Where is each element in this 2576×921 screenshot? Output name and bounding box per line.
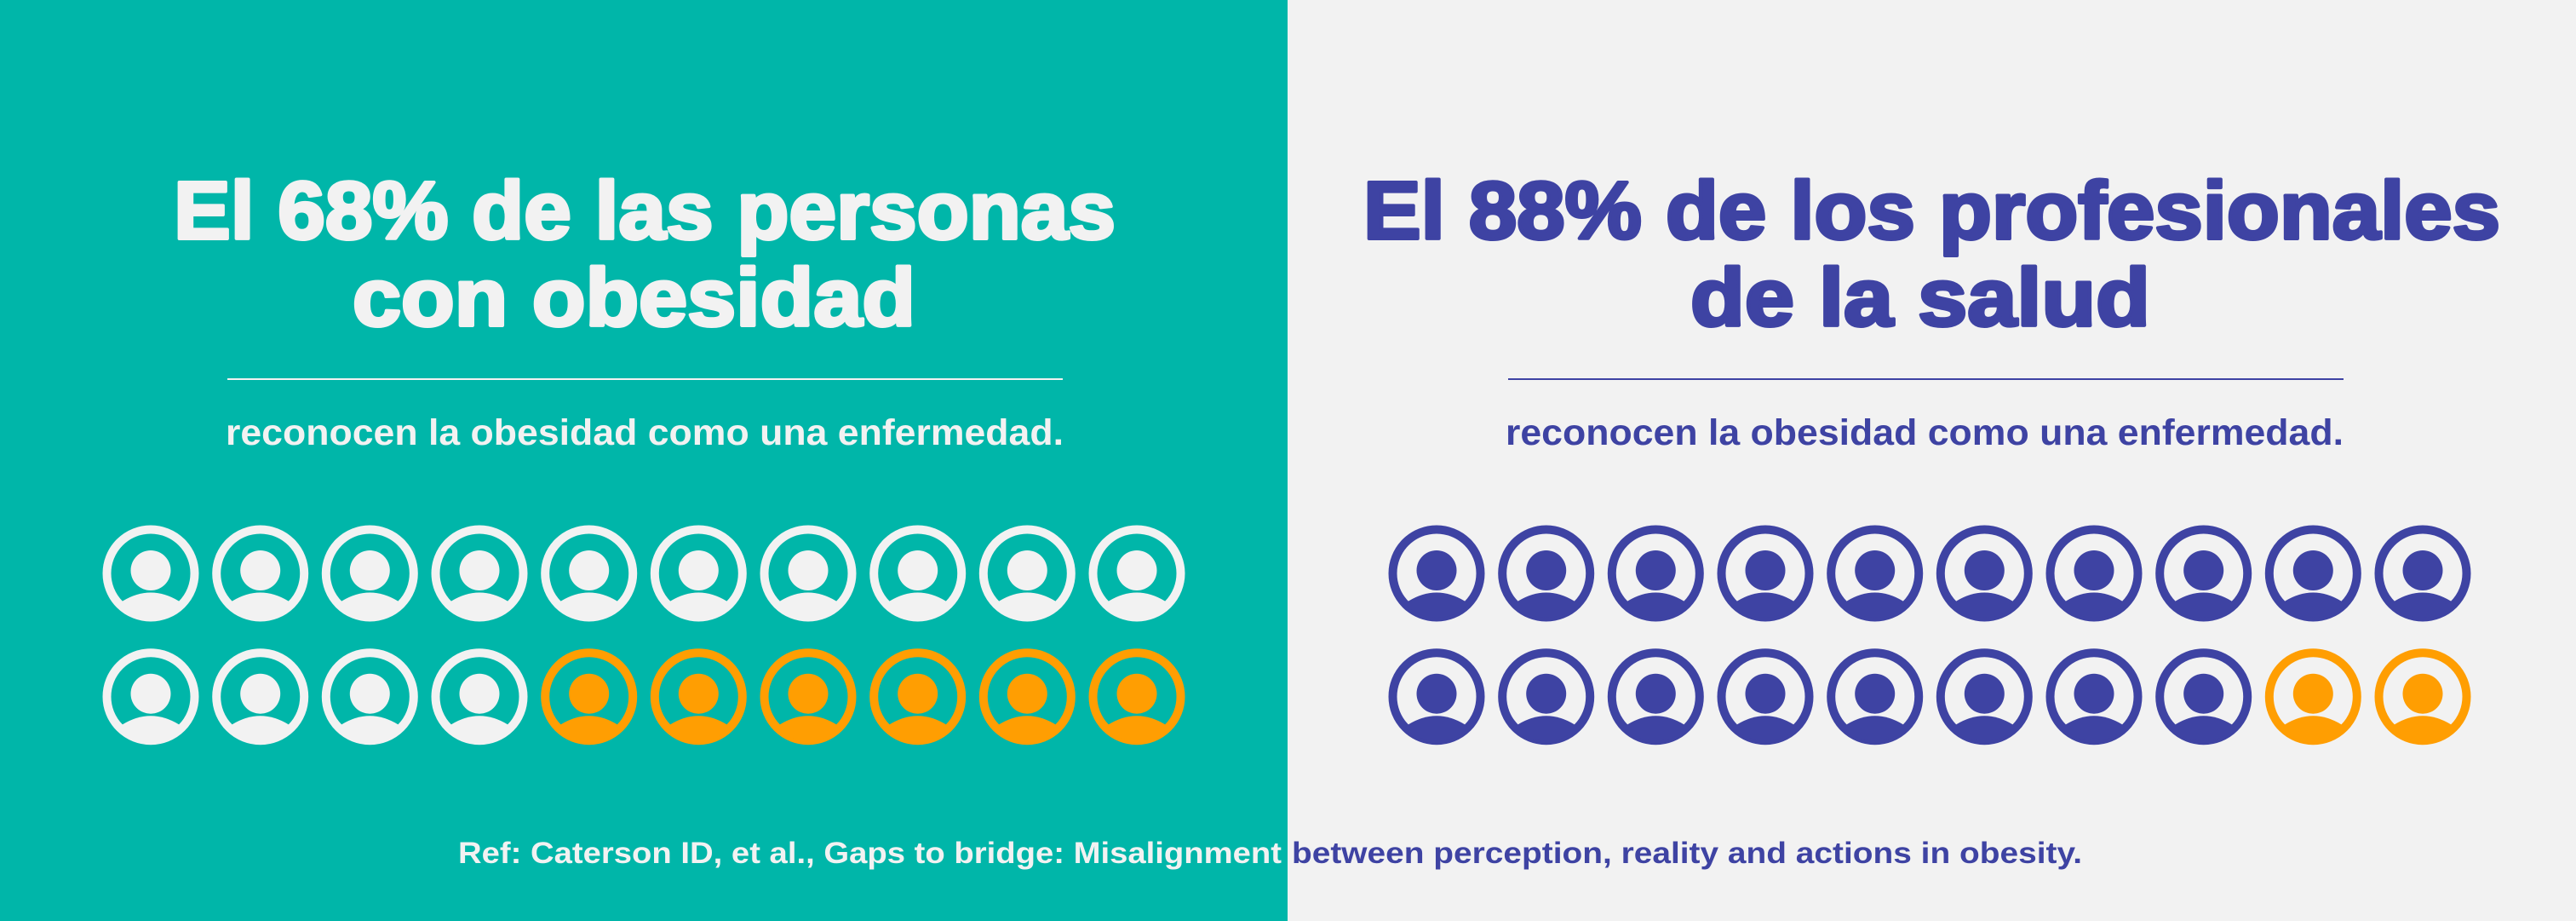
icon: person [545, 530, 633, 618]
icon: person [1393, 653, 1480, 741]
icon: person [436, 530, 523, 618]
panel: left background [0, 0, 1288, 921]
heading: left: El 68% de las personas [174, 165, 1116, 256]
icon: person [2051, 653, 2137, 741]
icon: person [1831, 530, 1919, 618]
icon: person orange [2379, 653, 2466, 741]
icon: person [1612, 530, 1700, 618]
icon: person [984, 530, 1071, 618]
subheading: right: reconocen la obesidad como una enfermedad. [1506, 412, 2344, 453]
icon grid: left, 68% marked [107, 530, 1180, 741]
icon: person [2160, 530, 2247, 618]
icon: person [1722, 530, 1809, 618]
icon: person [107, 653, 194, 741]
subheading: left: reconocen la obesidad como una enfermedad. [226, 412, 1064, 453]
icon: person [436, 653, 523, 741]
icon: person [1093, 530, 1180, 618]
icon: person [326, 530, 414, 618]
heading: left: con obesidad [353, 252, 915, 343]
icon: person [1393, 530, 1480, 618]
icon row: right top [1393, 530, 2466, 618]
panel: health professionals [1363, 165, 2500, 741]
icon: person [1502, 653, 1590, 741]
icon: person [874, 530, 961, 618]
icon: person [1941, 653, 2028, 741]
icon: person [2160, 653, 2247, 741]
icon: person [765, 530, 852, 618]
icon: person [216, 530, 304, 618]
heading: right: de la salud [1690, 252, 2150, 343]
icon: person orange [2269, 653, 2357, 741]
icon grid: right, 88% marked [1393, 530, 2466, 741]
icon row: right bottom [1393, 653, 2466, 741]
heading: right [1363, 165, 2500, 343]
icon: person [1722, 653, 1809, 741]
icon: person orange [765, 653, 852, 741]
icon: person [1612, 653, 1700, 741]
panel: people with obesity [107, 165, 1180, 741]
icon: person [216, 653, 304, 741]
icon: person orange [874, 653, 961, 741]
reference line [458, 837, 2082, 870]
icon: person orange [545, 653, 633, 741]
divider: left [227, 378, 1063, 380]
icon: person orange [984, 653, 1071, 741]
icon: person [326, 653, 414, 741]
icon: person orange [1093, 653, 1180, 741]
heading: right: El 88% de los profesionales [1363, 165, 2500, 256]
icon: person [2051, 530, 2137, 618]
icon: person [655, 530, 743, 618]
icon: person [2269, 530, 2357, 618]
heading: left [174, 165, 1116, 343]
icon: person [107, 530, 194, 618]
icon: person [2379, 530, 2466, 618]
divider: right [1508, 378, 2344, 380]
icon: person [1831, 653, 1919, 741]
reference line: Ref: Caterson ID, et al., Gaps to bridge: Misalignment [458, 837, 1282, 870]
icon: person [1941, 530, 2028, 618]
reference line: between perception, reality and actions in obesity. [1292, 837, 2082, 870]
icon row: left bottom [107, 653, 1180, 741]
panel: right background [1288, 0, 2576, 921]
icon: person [1502, 530, 1590, 618]
icon: person orange [655, 653, 743, 741]
icon row: left top [107, 530, 1180, 618]
